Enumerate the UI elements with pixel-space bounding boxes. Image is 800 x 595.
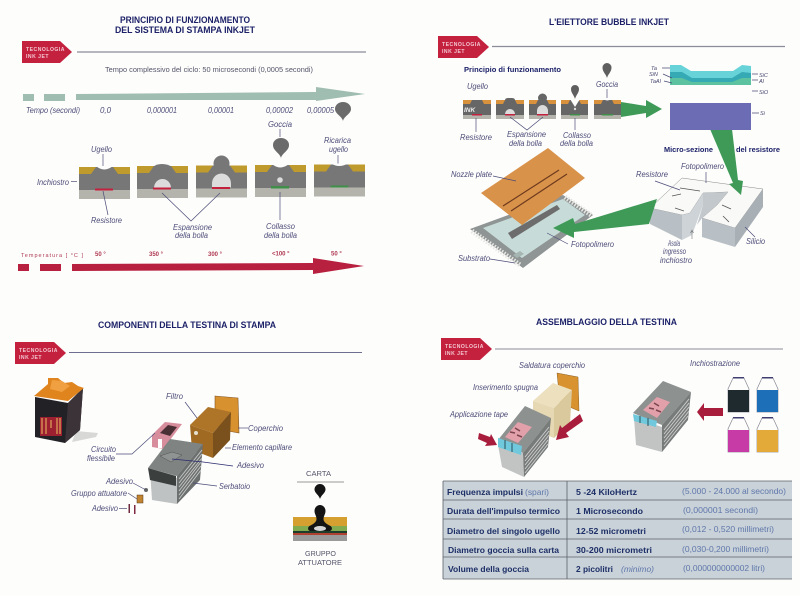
badge: tecnologia ink jet: INK JET [445,351,468,357]
specification table [443,481,792,579]
micro-section labels: Al [758,79,765,85]
bottle: magenta [728,417,749,452]
small cell labels: Collasso [563,131,591,140]
time scale labels: 0,00005 [307,106,335,115]
small cell labels [460,117,594,148]
substrate labels: Nozzle plate [451,170,493,179]
label: ricarica ugello: Ricarica [324,136,352,145]
icon: goccia drop: Goccia [268,120,293,129]
panel: assemblaggio della testina [441,317,792,579]
diagram: carta and gruppo attuatore: GRUPPO [305,551,337,558]
title: componenti: COMPONENTI DELLA TESTINA DI STAMPA [98,320,276,330]
part: capillary element [190,407,231,458]
temperature scale [21,252,342,259]
row: durata impulso [447,505,758,516]
micro-section labels: TaAl [650,79,662,85]
arrow: green to micro section [621,100,662,118]
component labels: Filtro [166,392,184,401]
label: ricarica ugello [324,136,352,165]
component labels: Elemento capillare [232,443,293,452]
panel: principio di funzionamento [18,15,366,274]
title: assemblaggio: ASSEMBLAGGIO DELLA TESTINA [536,317,677,327]
time scale labels: 0,000001 [147,106,177,115]
small cell 2 [496,98,524,119]
assembly step labels: Applicazione tape [449,410,509,419]
label: espansione della bolla [162,193,220,240]
silicon block labels: ingresso [663,247,686,256]
part: sponge [533,383,572,438]
tank center [633,381,691,452]
time scale labels: Tempo (secondi) [26,106,80,115]
heading: micro-sezione del resistore: del resistore [736,145,780,154]
substrate labels: Fotopolimero [571,240,615,249]
small cell 4 with drop [561,85,588,119]
label: resistore: Resistore [91,216,122,225]
cell: ricarica stage 5 [314,164,365,196]
icon: goccia drop: Goccia [596,80,618,89]
cell: espansione stage 3 [196,156,247,198]
label: collasso della bolla: Collasso [266,222,296,231]
row: diametro ugello [447,524,774,536]
icon: drop top right [335,102,351,121]
part: small adhesive and actuator [128,488,148,514]
row: diametro goccia [448,544,769,555]
small cell 1 [463,100,491,119]
badge: tecnologia ink jet: INK JET [19,355,42,361]
micro-section layers [670,65,751,130]
small cell 1: INK [464,107,476,114]
title: principio: DEL SISTEMA DI STAMPA INKJET [115,25,255,35]
icon: goccia drop [596,63,618,98]
row: diametro goccia: Diametro goccia sulla carta [448,545,559,555]
row: volume goccia: 2 picolitri [576,564,613,574]
row: volume goccia: (minimo) [621,565,654,574]
diagram: carta and gruppo attuatore: CARTA [306,471,331,478]
component labels: Gruppo attuatore [71,489,128,498]
small cell labels: Resistore [460,133,493,142]
component labels: Adesivo [91,504,118,513]
substrate [470,195,593,268]
temperature scale: 350 ° [149,252,164,258]
silicon block labels [636,162,765,265]
assembly step labels: Inserimento spugna [473,383,539,392]
heading: micro-sezione del resistore [664,145,780,154]
bottle: yellow [757,417,778,452]
row: frequenza impulsi: Frequenza impulsi [447,487,523,497]
badge: tecnologia ink jet [441,338,492,360]
substrate labels: Substrato [458,254,491,263]
small cell 5 [594,99,621,119]
badge: tecnologia ink jet [22,41,72,63]
silicon block [650,178,763,247]
silicon block labels: Fotopolimero [681,162,725,171]
time scale labels: 0,00001 [208,106,234,115]
time scale labels: 0,0 [100,106,112,115]
label: collasso della bolla [264,192,298,240]
component labels: Adesivo [105,477,134,486]
part: circuito flessibile [152,422,182,450]
cell: collasso stage 4 [255,164,306,197]
silicon block labels: inchiostro [660,256,693,265]
arrow: inking [697,403,723,421]
small cell 3 [529,94,556,119]
time scale labels: 0,00002 [266,106,294,115]
assembly step labels [449,359,741,419]
badge: tecnologia ink jet [15,342,66,364]
label: espansione della bolla: Espansione [173,223,213,232]
silicon block labels: Asola [667,239,680,248]
component labels [71,392,293,513]
arrow: green to fotopolimero block [710,129,743,195]
component labels: Serbatoio [219,482,250,491]
row: diametro ugello: Diametro del singolo ugello [447,526,560,536]
cycle time caption: Tempo complessivo del ciclo: 50 microsecondi (0,0005 secondi) [105,65,313,74]
row: diametro ugello: 12-52 micrometri [576,526,646,536]
arrow: sponge [556,414,583,440]
micro-section labels [649,66,769,117]
component labels: Coperchio [248,424,284,433]
badge: tecnologia ink jet: TECNOLOGIA [26,47,65,53]
label: ricarica ugello: ugello [329,145,348,154]
nozzle plate [481,148,585,225]
badge: tecnologia ink jet: INK JET [26,54,49,60]
bottle: blue [757,377,778,412]
temperature scale: 50 ° [95,252,106,258]
component labels: flessibile [87,454,115,463]
small cell labels: della bolla [560,139,594,148]
label: ugello: Ugello [91,145,113,154]
part: coperchio lid [215,396,239,433]
row: volume goccia [448,563,765,574]
panel: eiettore bubble inkjet [438,17,785,268]
micro-section labels: SiN [649,72,658,78]
label: espansione della bolla: della bolla [175,231,209,240]
row: diametro goccia: (0,030-0,200 millimetri) [682,544,769,554]
badge: tecnologia ink jet [438,36,489,58]
title: eiettore: L'EIETTORE BUBBLE INKJET [549,17,669,27]
assembly step labels: Saldatura coperchio [519,361,586,370]
panel: componenti della testina [15,320,362,567]
silicon block labels: Resistore [636,170,669,179]
row: durata impulso: (0,000001 secondi) [683,505,758,515]
row: frequenza impulsi: (spari) [525,487,549,497]
title: principio: PRINCIPIO DI FUNZIONAMENTO [120,15,250,25]
temperature scale: 300 ° [208,252,223,258]
row: diametro goccia: 30-200 micrometri [576,545,652,555]
label: resistore [91,191,122,225]
component labels: Adesivo [236,461,265,470]
substrate labels [451,170,615,263]
temperature scale: <100 ° [272,252,290,258]
part: lid orange [557,373,579,411]
micro-section labels: Ta [651,66,657,72]
time scale labels [26,106,335,115]
micro-section labels: SiO [759,90,769,96]
row: durata impulso: 1 Microsecondo [576,506,643,516]
small cell labels: della bolla [509,139,543,148]
row: diametro ugello: (0,012 - 0,520 millimetri) [682,524,774,534]
cell: espansione stage 2 [137,164,188,198]
micro-section labels: SiC [759,73,768,79]
arrow: tape [478,433,497,446]
row: frequenza impulsi: (5.000 - 24.000 al secondo) [682,486,786,496]
tank with tape [498,406,551,477]
badge: tecnologia ink jet: TECNOLOGIA [442,42,481,48]
row: frequenza impulsi: 5 -24 KiloHertz [576,487,637,497]
temperature scale: 50 ° [331,252,342,258]
micro-section labels: Si [760,111,766,117]
icon: goccia drop [268,120,293,158]
diagram: carta and gruppo attuatore: ATTUATORE [298,560,342,567]
temperature scale: Temperatura [ °C ] [21,253,83,259]
row: frequenza impulsi [447,486,786,497]
small cell labels: Espansione [507,130,547,139]
heading: micro-sezione del resistore: Micro-sezione [664,145,713,154]
row: volume goccia: Volume della goccia [448,564,529,574]
part: serbatoio tank [148,439,203,504]
label: ugello: Ugello [467,82,489,91]
label: ugello [91,145,113,166]
badge: tecnologia ink jet: TECNOLOGIA [19,348,58,354]
badge: tecnologia ink jet: TECNOLOGIA [445,344,484,350]
time arrow [23,87,365,101]
silicon block labels: Silicio [746,237,765,246]
label: inchiostro: Inchiostro [37,178,70,187]
component labels: Circuito [91,445,117,454]
row: durata impulso: Durata dell'impulso termico [447,506,560,516]
temperature arrow [18,258,364,274]
label: collasso della bolla: della bolla [264,231,298,240]
badge: tecnologia ink jet: INK JET [442,49,465,55]
arrow: green to substrate [553,199,657,238]
subheading: principio di funzionamento: Principio di funzionamento [464,65,561,74]
title: principio [115,15,255,35]
cell: ugello stage 1 [79,166,130,199]
diagram: carta and gruppo attuatore [293,471,347,567]
cartridge photo [34,378,98,443]
row: volume goccia: (0,000000000002 litri) [683,563,765,573]
bottle: black [728,377,749,412]
assembly step labels: Inchiostrazione [690,359,741,368]
